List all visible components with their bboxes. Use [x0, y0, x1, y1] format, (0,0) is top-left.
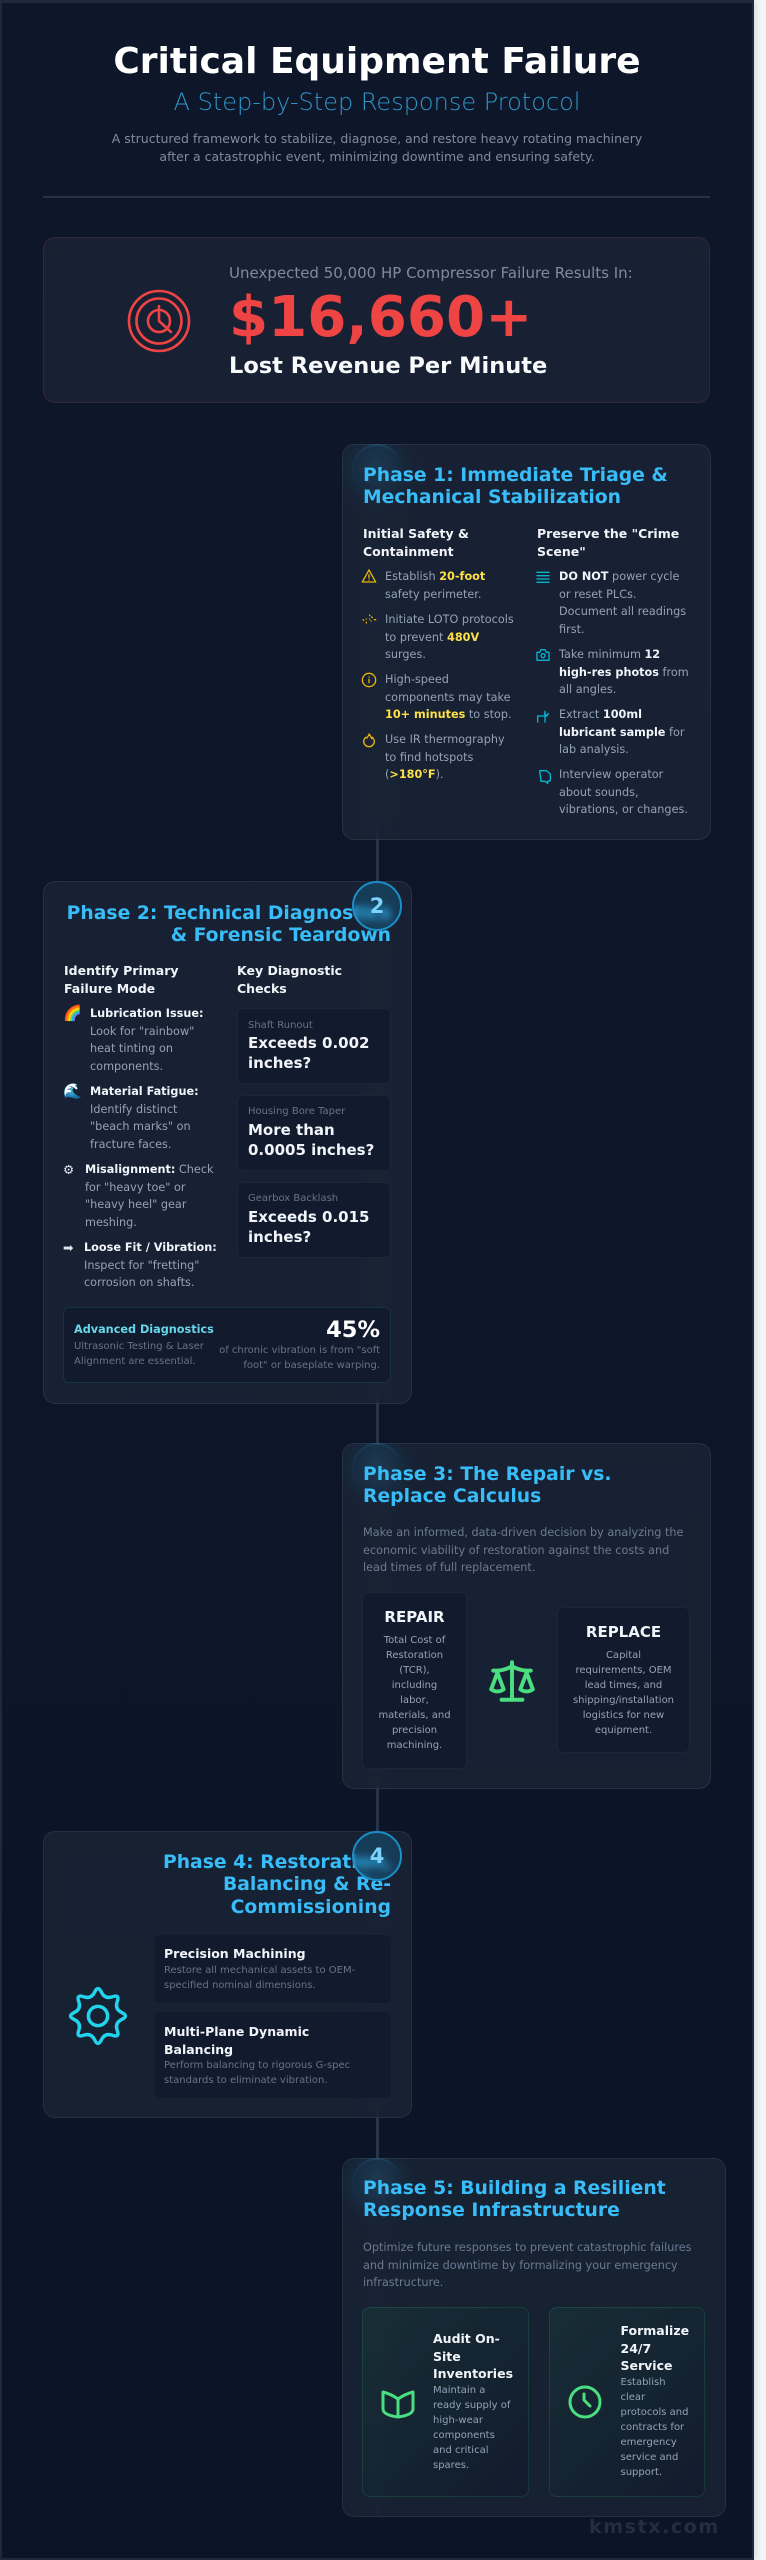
item: LOTO: Initiate LOTO protocols: [385, 613, 514, 626]
icon: book: [382, 2390, 414, 2418]
item: thermography: [363, 733, 505, 781]
item: do not cycle: DO NOT power cycle: [559, 570, 679, 583]
check: shaft runout: [237, 1008, 391, 1084]
heading: & Forensic Teardown: [171, 925, 391, 946]
card: service: support.: [620, 2467, 662, 2478]
marker: phase 3: 3: [370, 1456, 384, 1480]
subtitle: A Step-by-Step Response Protocol: [174, 88, 580, 116]
description: lead times of full replacement.: [363, 1561, 535, 1574]
item: loose fit: corrosion on shafts.: [84, 1276, 194, 1289]
item: misalignment: meshing.: [85, 1216, 137, 1229]
item: do not cycle: Document all readings: [559, 605, 686, 618]
check: housing bore: Housing Bore Taper: [248, 1106, 345, 1117]
marker: phase 2: 2: [370, 894, 384, 918]
check: housing bore: [237, 1094, 391, 1170]
card: service: contracts for: [620, 2422, 684, 2433]
intro text: [112, 131, 642, 164]
heading: Balancing & Re-: [223, 1874, 391, 1895]
heading: Phase 1: Immediate Triage &: [363, 465, 668, 486]
item: photos: high-res photos from: [559, 666, 689, 679]
callout: advanced diagnostics: Ultrasonic Testing & Laser: [74, 1340, 204, 1352]
card: service: [549, 2307, 705, 2497]
item: thermography: to find hotspots: [385, 751, 473, 764]
description: economic viability of restoration against the costs and: [363, 1544, 669, 1557]
check: housing bore: More than: [248, 1120, 335, 1138]
card: repair: Total Cost of: [384, 1634, 445, 1646]
check: gearbox: inches?: [248, 1228, 311, 1246]
column heading: preserve: [537, 526, 679, 559]
description: Optimize future responses to prevent catastrophic failures: [363, 2241, 692, 2254]
alert caption: Lost Revenue Per Minute: [229, 353, 547, 379]
check: shaft runout: inches?: [248, 1054, 311, 1072]
item: do not cycle: or reset PLCs.: [559, 588, 636, 601]
heading: Mechanical Stabilization: [363, 487, 621, 508]
check: gearbox: [237, 1182, 391, 1258]
item: misalignment: Misalignment: Check: [85, 1163, 214, 1176]
card: repair: Restoration: [386, 1650, 443, 1661]
card: repair: REPAIR: [384, 1608, 445, 1626]
item: spin-down: 10+ minutes to stop.: [385, 708, 512, 721]
step: precision machining: Restore all mechanical assets to OEM-: [164, 1964, 355, 1976]
item: lubricant: lab analysis.: [559, 743, 629, 756]
column heading: checks: [237, 963, 342, 996]
step: dynamic balancing: Multi-Plane Dynamic: [164, 2024, 309, 2039]
card: service: Service: [620, 2358, 672, 2373]
item: loose fit: Loose Fit / Vibration:: [84, 1241, 217, 1254]
item: spin-down: components may take: [385, 691, 511, 704]
heading: Phase 2: Technical Diagnostics: [67, 903, 391, 924]
item: fatigue: Material Fatigue:: [90, 1085, 199, 1098]
heading: [163, 1850, 394, 1918]
step: precision machining: Precision Machining: [164, 1946, 306, 1961]
icon: scales: [489, 1660, 535, 1702]
step: dynamic balancing: standards to eliminate vibration.: [164, 2075, 328, 2086]
item: interview: Interview operator: [559, 768, 663, 781]
heading: [67, 901, 395, 946]
item: lubrication: Look for "rainbow": [90, 1025, 194, 1038]
item: spin-down: High-speed: [385, 673, 449, 686]
step: dynamic balancing: Perform balancing to rigorous G-spec: [164, 2060, 350, 2070]
item: photos: all angles.: [559, 683, 616, 696]
card: replace: [557, 1607, 690, 1753]
step: precision machining: specified nominal dimensions.: [164, 1980, 316, 1991]
item: do not cycle: first.: [559, 623, 585, 636]
marker: phase 1: [352, 444, 402, 494]
item: thermography: (>180°F).: [385, 768, 444, 781]
item: interview: [539, 768, 688, 816]
panel: phase 2: 🌊: [63, 1082, 82, 1100]
item: misalignment: "heavy heel" gear: [85, 1198, 186, 1211]
item: do not cycle: [536, 570, 686, 636]
heading: [363, 1464, 612, 1507]
item: interview: about sounds,: [559, 786, 639, 799]
card: repair: [362, 1592, 467, 1769]
callout: advanced diagnostics: 45%: [326, 1317, 380, 1343]
card: service: service and: [620, 2452, 678, 2463]
card: inventories: and critical: [433, 2445, 488, 2456]
heading: [363, 465, 668, 508]
description: [363, 2241, 692, 2289]
column heading: checks: Checks: [237, 981, 287, 996]
item: fatigue: "beach marks" on: [90, 1120, 191, 1133]
card: repair: precision: [392, 1725, 437, 1736]
item: LOTO: surges.: [385, 648, 426, 661]
callout: advanced diagnostics: Advanced Diagnostics: [74, 1323, 214, 1336]
description: [363, 1526, 683, 1574]
card: inventories: spares.: [433, 2460, 469, 2471]
card: inventories: Maintain a: [433, 2384, 485, 2396]
column heading: safety: [363, 526, 469, 559]
heading: Phase 3: The Repair vs.: [363, 1464, 612, 1485]
item: loose fit: [63, 1240, 217, 1289]
heading: Response Infrastructure: [363, 2200, 620, 2221]
alert lead-in: Unexpected 50,000 HP Compressor Failure Results In:: [229, 264, 633, 282]
check: shaft runout: Shaft Runout: [248, 1020, 313, 1030]
description: and minimize downtime by formalizing your emergency: [363, 2259, 678, 2272]
description: infrastructure.: [363, 2276, 443, 2289]
heading: Commissioning: [231, 1897, 391, 1918]
item: lubrication: Lubrication Issue:: [90, 1007, 204, 1020]
card: inventories: Inventories: [433, 2366, 513, 2381]
marker: phase 5: [352, 2158, 402, 2208]
item: perimeter: [362, 569, 485, 601]
icon: clock: [568, 2386, 602, 2418]
item: fatigue: fracture faces.: [90, 1138, 171, 1151]
item: thermography: Use IR thermography: [385, 733, 505, 746]
step: dynamic balancing: [154, 2012, 391, 2098]
item: loose fit: Inspect for "fretting": [84, 1259, 199, 1272]
card: service: Establish: [620, 2376, 666, 2388]
item: fatigue: Identify distinct: [90, 1103, 177, 1116]
panel: phase 1: [342, 444, 711, 840]
heading: [363, 2178, 666, 2221]
card: service: 24/7: [620, 2341, 651, 2356]
item: misalignment: [63, 1162, 214, 1229]
card: repair: (TCR),: [399, 1665, 430, 1676]
column heading: failure mode: [64, 963, 179, 996]
panel: phase 2: ⚙: [63, 1162, 74, 1177]
check: housing bore: 0.0005 inches?: [248, 1140, 374, 1158]
item: LOTO: to prevent 480V: [385, 631, 479, 644]
item: interview: vibrations, or changes.: [559, 803, 688, 816]
item: fatigue: [63, 1082, 199, 1151]
card: repair: labor,: [400, 1695, 429, 1706]
item: perimeter: Establish 20-foot: [385, 570, 485, 583]
item: lubricant: lubricant sample for: [559, 726, 684, 739]
check: gearbox: Exceeds 0.015: [248, 1208, 370, 1226]
check: gearbox: Gearbox Backlash: [248, 1193, 338, 1204]
card: replace: logistics for new: [583, 1710, 664, 1721]
card: replace: Capital: [606, 1650, 641, 1660]
icon: gear: [68, 1986, 128, 2046]
card: replace: REPLACE: [586, 1623, 661, 1641]
marker: phase 4: [352, 1831, 402, 1881]
card: replace: equipment.: [595, 1725, 652, 1736]
card: repair: including: [392, 1680, 437, 1691]
column heading: safety: Initial Safety &: [363, 526, 469, 541]
card: repair: machining.: [387, 1740, 442, 1751]
callout: advanced diagnostics: Alignment are essential.: [74, 1356, 196, 1367]
heading: Phase 4: Restoration,: [163, 1852, 391, 1873]
item: misalignment: for "heavy toe" or: [85, 1181, 186, 1194]
panel: phase 4: [43, 1831, 412, 2118]
panel: phase 5: [342, 2158, 726, 2517]
card: inventories: high-wear: [433, 2415, 483, 2426]
column heading: safety: Containment: [363, 544, 454, 559]
item: lubrication: components.: [90, 1060, 163, 1073]
step: precision machining: [154, 1935, 391, 2003]
card: inventories: Site: [433, 2349, 461, 2364]
marker: phase 2: [352, 881, 402, 931]
item: LOTO: [362, 613, 514, 661]
panel: alert card: [43, 237, 710, 403]
callout: advanced diagnostics: of chronic vibration is from "soft: [219, 1344, 380, 1356]
column heading: preserve: Scene": [537, 544, 586, 559]
item: lubrication: [63, 1004, 204, 1073]
card: replace: requirements, OEM: [575, 1665, 672, 1676]
panel: phase 2: 🌈: [63, 1004, 82, 1022]
step: dynamic balancing: Balancing: [164, 2042, 233, 2057]
heading: Replace Calculus: [363, 1486, 541, 1507]
card: service: protocols and: [620, 2407, 688, 2418]
card: service: emergency: [620, 2437, 677, 2448]
card: inventories: ready supply of: [433, 2400, 510, 2411]
card: inventories: components: [433, 2430, 495, 2441]
column heading: checks: Key Diagnostic: [237, 963, 342, 978]
big number: $16,660+: [229, 285, 532, 350]
intro text: after a catastrophic event, minimizing downtime and ensuring safety.: [159, 149, 595, 164]
item: spin-down: [362, 672, 512, 721]
intro text: A structured framework to stabilize, diagnose, and restore heavy rotating machinery: [112, 131, 642, 146]
card: service: Formalize: [620, 2323, 689, 2338]
heading: Phase 5: Building a Resilient: [363, 2178, 666, 2199]
title: Critical Equipment Failure: [113, 41, 641, 82]
item: lubrication: heat tinting on: [90, 1042, 173, 1055]
check: shaft runout: Exceeds 0.002: [248, 1034, 370, 1052]
panel: phase 2: ➡: [63, 1240, 73, 1255]
item: photos: Take minimum 12: [559, 648, 660, 661]
column heading: failure mode: Identify Primary: [64, 963, 179, 978]
watermark: kmstx.com: [589, 2516, 720, 2538]
item: photos: [536, 648, 689, 696]
marker: phase 4: 4: [370, 1844, 384, 1868]
icon: red target clock: [128, 290, 190, 352]
card: inventories: Audit On-: [433, 2331, 500, 2346]
description: Make an informed, data-driven decision by analyzing the: [363, 1526, 683, 1539]
panel: phase 3: [342, 1443, 711, 1789]
card: replace: lead times, and: [585, 1680, 662, 1691]
card: repair: materials, and: [378, 1710, 451, 1721]
item: lubricant: [537, 708, 684, 756]
card: inventories: [362, 2307, 529, 2497]
card: service: clear: [620, 2392, 645, 2403]
panel: phase 2: [43, 881, 412, 1404]
card: replace: shipping/installation: [573, 1695, 674, 1706]
marker: phase 1: 1: [370, 457, 384, 481]
callout: advanced diagnostics: [63, 1307, 391, 1383]
marker: phase 5: 5: [370, 2171, 384, 2195]
item: lubricant: Extract 100ml: [559, 708, 642, 721]
column heading: preserve: Preserve the "Crime: [537, 526, 679, 541]
marker: phase 3: [352, 1443, 402, 1493]
callout: advanced diagnostics: foot" or baseplate warping.: [243, 1360, 380, 1371]
column heading: failure mode: Failure Mode: [64, 981, 155, 996]
item: perimeter: safety perimeter.: [385, 588, 481, 601]
